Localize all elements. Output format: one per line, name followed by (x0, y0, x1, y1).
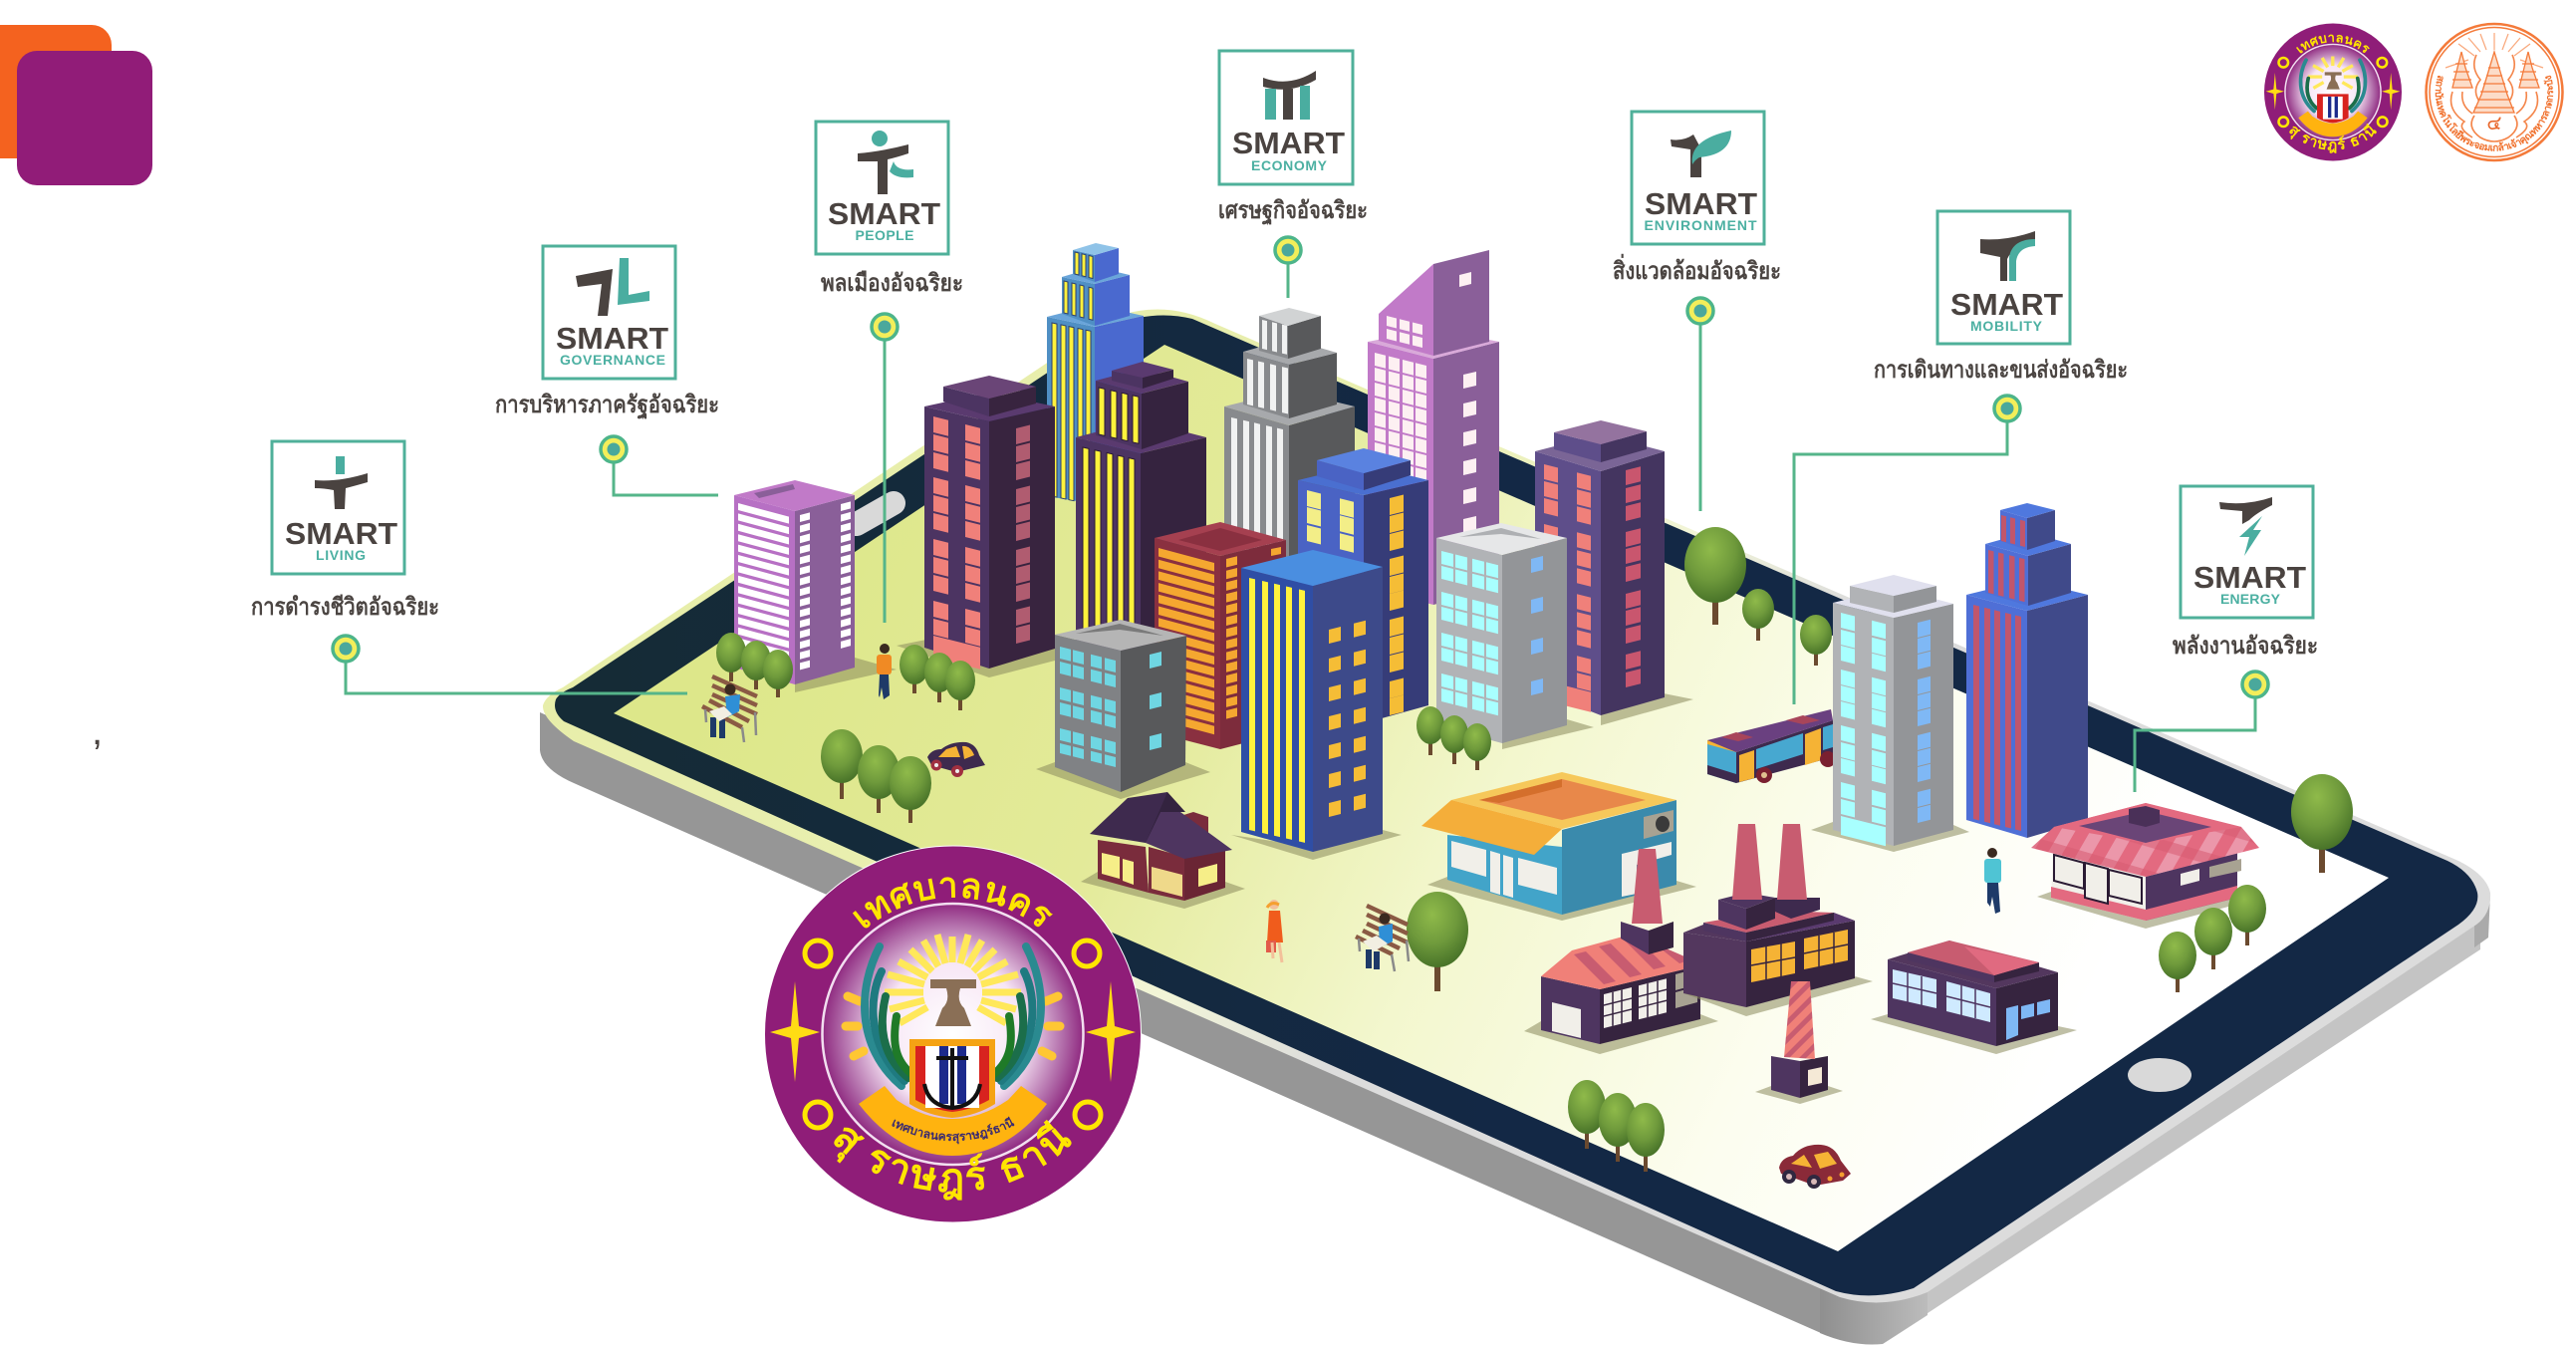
small seal rings (2279, 58, 2387, 127)
building: dark tower with yellow stripes (1076, 362, 1206, 697)
small seal upper text: เทศบาลนคร (2296, 34, 2370, 54)
connector: governance (614, 463, 718, 495)
label: living: การดำรงชีวิตอัจฉริยะ (251, 594, 439, 621)
ribbon (859, 1086, 1047, 1156)
seal rings (805, 941, 1101, 1128)
card: smart governance (543, 246, 675, 379)
small seal stars (2266, 73, 2400, 110)
small seal wings (2301, 60, 2365, 112)
small seal ribbon (2298, 112, 2368, 136)
card: smart living (272, 441, 404, 574)
building: red orange-striped block (1155, 522, 1286, 749)
tree cluster left of car (821, 729, 931, 823)
seal upper text: เทศบาลนคร (853, 877, 1053, 929)
small seal inner field (2285, 44, 2381, 140)
icon: people (858, 131, 913, 194)
tablet left side wall (540, 712, 1821, 1333)
tablet device (540, 309, 2490, 1345)
building: shop with orange roof (1421, 772, 1696, 921)
smart wordmark: SMART (2193, 560, 2306, 595)
label: governance: การบริหารภาครัฐอัจฉริยะ (495, 392, 719, 420)
home button (2128, 1058, 2191, 1092)
seal stars (770, 981, 1136, 1082)
small seal shield (2317, 94, 2349, 123)
connector: living (346, 663, 687, 693)
card sublabel: ENVIRONMENT (1644, 217, 1757, 233)
temple towers (2452, 52, 2539, 113)
smart wordmark: SMART (556, 321, 668, 356)
seal disc (765, 846, 1142, 1222)
card sublabel: MOBILITY (1970, 318, 2043, 334)
institute seal orange (2425, 22, 2564, 161)
person: orange shirt man (877, 644, 892, 699)
building: house (1081, 792, 1245, 909)
dot: mobility (1994, 396, 2020, 421)
tablet right corner (2474, 893, 2490, 947)
tablet screen (614, 345, 2389, 1251)
card: smart mobility (1937, 211, 2070, 344)
person: bench reader right (1356, 906, 1409, 971)
icon: economy (1263, 71, 1316, 120)
card: smart energy (2181, 486, 2313, 618)
right wing (994, 946, 1041, 1086)
building: grey block with teal windows (1036, 620, 1210, 799)
pedestal (930, 979, 976, 1026)
trees (716, 527, 2353, 1172)
building: silver block with cyan windows (1436, 523, 1594, 749)
building: blue yellow-striped tower (1047, 243, 1144, 504)
building: grey white-striped tower (1224, 308, 1355, 677)
label: economy: เศรษฐกิจอัจฉริยะ (1218, 197, 1368, 226)
smart wordmark: SMART (1645, 186, 1757, 221)
tablet bezel (555, 315, 2477, 1295)
tablet rim (543, 309, 2490, 1302)
building: twin-stack factory (1683, 824, 1873, 1016)
small seal pedestal (2325, 72, 2342, 90)
stray comma mark: , (92, 709, 103, 753)
left wing (865, 946, 911, 1086)
building: city bus (1707, 709, 1836, 783)
tablet right side wall (1873, 907, 2480, 1344)
building: pink white-striped block (734, 480, 897, 692)
connector: economy (1287, 264, 1289, 298)
smart wordmark: SMART (285, 516, 397, 551)
tree cluster bottom (1568, 1080, 1665, 1172)
seal lower text: สุ ราษฎร์ ธานี (834, 1120, 1072, 1201)
card: smart people (816, 122, 948, 254)
building: blue tower with red stripes (1966, 503, 2088, 838)
outer petals (846, 996, 1060, 1056)
smart wordmark: SMART (1232, 126, 1345, 160)
dot: economy (1275, 237, 1301, 263)
seal inner field (823, 904, 1084, 1165)
city buildings (734, 243, 2259, 1104)
numeral mark: ๔ (2486, 113, 2502, 134)
marker dots (333, 237, 2268, 697)
tablet bottom corner (1820, 1285, 1928, 1345)
sun rays (2446, 33, 2543, 68)
sun rays (885, 935, 1021, 1023)
building: silver tall tower (1811, 575, 1969, 852)
dot: energy (2242, 672, 2268, 697)
card: smart economy (1219, 51, 1353, 184)
card: smart environment (1632, 112, 1764, 244)
card sublabel: ENERGY (2220, 591, 2281, 607)
card sublabel: ECONOMY (1251, 157, 1328, 173)
small seal rays (2308, 57, 2358, 88)
building: striped chimney (1755, 981, 1843, 1104)
icon: governance (576, 258, 649, 316)
small seal disc (2264, 24, 2402, 160)
building: blue tower with amber windows (1298, 448, 1428, 723)
small seal lower text: สุ ราษฎร์ ธานี (2289, 124, 2377, 153)
tree cluster near pink block (716, 633, 793, 697)
corner accent: purple square (17, 51, 152, 185)
building: purple slanted tower (1368, 250, 1499, 605)
smart wordmark: SMART (828, 196, 940, 231)
institute name: สถาบันเทคโนโลยีพระจอมเกล้าเจ้าคุณทหารลาดกระบัง (2435, 76, 2554, 151)
tree cluster near walking man (900, 645, 975, 710)
tree cluster by silver block (1417, 706, 1491, 770)
icon: mobility (1980, 231, 2035, 281)
building: pink checkered shop (2031, 803, 2259, 929)
dot: living (333, 636, 359, 662)
double ring (2427, 24, 2562, 160)
person: bench reader left (702, 676, 757, 742)
label: environment: สิ่งแวดล้อมอัจฉริยะ (1613, 253, 1781, 285)
connector: environment (1699, 325, 1701, 511)
building: big blue tower with yellow stripes (1231, 550, 1402, 860)
icon: environment (1671, 131, 1731, 177)
connector: people (883, 341, 887, 623)
building: purple office with blue windows (1871, 941, 2077, 1054)
label: energy: พลังงานอัจฉริยะ (2173, 633, 2318, 660)
dot: environment (1687, 298, 1713, 324)
building: red-roof factory (1524, 849, 1718, 1054)
card sublabel: LIVING (316, 547, 366, 563)
building: indigo salmon-window tower (1535, 420, 1693, 725)
building: dark tower with salmon windows (897, 376, 1086, 677)
large municipal seal (765, 845, 1142, 1221)
people and cars (702, 644, 2001, 1189)
person: woman in orange dress (1266, 900, 1283, 962)
label: people: พลเมืองอัจฉริยะ (821, 270, 963, 297)
person: teal shirt man (1984, 848, 2001, 914)
large tree at right edge (2291, 774, 2353, 873)
connector: mobility (1794, 422, 2007, 704)
small municipal seal (2264, 24, 2402, 161)
car: purple with orange windows (927, 742, 985, 777)
smart wordmark: SMART (1950, 287, 2063, 322)
dot: governance (601, 436, 627, 462)
vine ornaments (2450, 55, 2538, 141)
card sublabel: GOVERNANCE (560, 352, 665, 368)
icon: living (315, 456, 368, 509)
ribbon text: เทศบาลนครสุราษฎร์ธานี (892, 1116, 1014, 1144)
large tree by bench (1407, 892, 1468, 991)
connector lines (346, 264, 2255, 792)
anchor (924, 1048, 980, 1108)
dot: people (872, 314, 898, 340)
trees upper right of indigo tower (1684, 527, 1832, 666)
tree row lower right (2159, 885, 2266, 992)
speaker pill (857, 503, 894, 524)
icon: energy (2219, 497, 2272, 556)
card sublabel: PEOPLE (855, 227, 914, 243)
label: mobility: การเดินทางและขนส่งอัจฉริยะ (1874, 357, 2128, 384)
corner accent: orange square (0, 25, 112, 158)
connector: energy (2135, 698, 2255, 792)
shield (909, 1039, 995, 1118)
car: red with amber windows (1779, 1145, 1851, 1189)
